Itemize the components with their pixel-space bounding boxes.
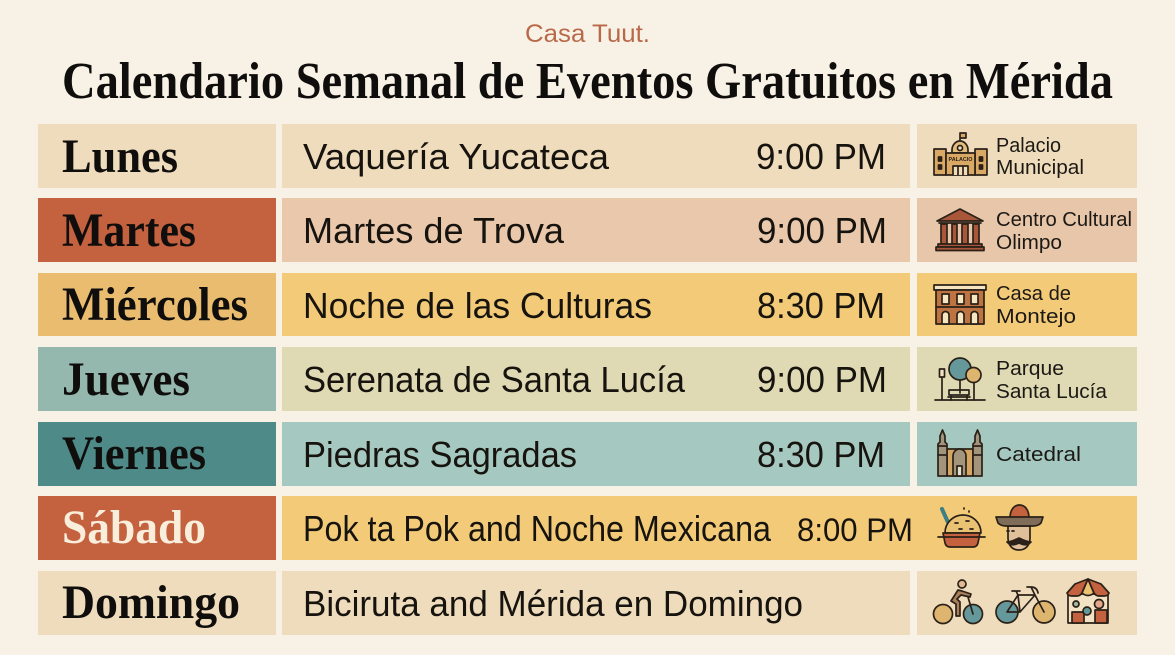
row: Jueves: Jueves — [62, 353, 190, 406]
icon: Centro Cultural Olimpo — [936, 209, 984, 250]
row: Miércoles: 8:30 PM — [757, 285, 885, 326]
row: Sábado — [38, 496, 1137, 560]
row: Miércoles: Casa de — [996, 283, 1071, 305]
row: Viernes — [38, 422, 1137, 486]
icon: cyclist — [934, 580, 982, 624]
row: Lunes: Palacio — [996, 135, 1061, 157]
row: Jueves: Santa Lucía — [996, 381, 1108, 403]
row: Miércoles: Montejo — [996, 306, 1076, 328]
row: Viernes: Catedral — [996, 444, 1081, 466]
row: Martes: Centro Cultural — [996, 209, 1132, 231]
row: Jueves: Serenata de Santa Lucía — [303, 359, 686, 400]
icon: Catedral — [938, 430, 982, 476]
row: Martes — [38, 198, 1137, 262]
icon: bicycle — [996, 587, 1055, 623]
icon: rice bowl — [938, 508, 985, 547]
row: Martes: 9:00 PM — [757, 210, 887, 251]
icon: Casa de Montejo — [934, 285, 986, 324]
row: Sábado: Pok ta Pok and Noche Mexicana — [303, 508, 772, 549]
row: Jueves: Parque — [996, 358, 1064, 380]
row: Martes: Olimpo — [996, 232, 1062, 254]
row: Miércoles: Miércoles — [62, 278, 248, 331]
row: Martes: Martes — [62, 204, 196, 257]
row: Sábado: 8:00 PM — [797, 512, 913, 548]
row: Domingo: Biciruta and Mérida en Domingo — [303, 583, 803, 624]
row: Lunes — [38, 124, 1137, 188]
row: Lunes: Lunes — [62, 130, 178, 183]
row: Domingo: Domingo — [62, 576, 240, 629]
icon: Palacio Municipal: PALACIO — [948, 157, 973, 163]
row: Viernes: 8:30 PM — [757, 434, 885, 475]
row: Sábado: Sábado — [62, 501, 206, 554]
row: Viernes: Piedras Sagradas — [303, 434, 577, 475]
row: Viernes: Viernes — [62, 427, 206, 480]
icon: mariachi face — [996, 505, 1043, 550]
row: Miércoles — [38, 273, 1137, 336]
row: Lunes: 9:00 PM — [756, 136, 886, 177]
row: Lunes: Municipal — [996, 157, 1084, 179]
row: Jueves: 9:00 PM — [757, 359, 887, 400]
row: Domingo — [38, 571, 1137, 635]
icon: Parque Santa Lucía — [935, 358, 985, 400]
icon: Palacio Municipal — [934, 133, 987, 175]
icon: market stall — [1067, 579, 1109, 623]
row: Lunes: Vaquería Yucateca — [303, 136, 610, 177]
row: Martes: Martes de Trova — [303, 210, 565, 251]
row: Jueves — [38, 347, 1137, 411]
brand name: Casa Tuut. — [525, 20, 650, 48]
row: Miércoles: Noche de las Culturas — [303, 285, 652, 326]
